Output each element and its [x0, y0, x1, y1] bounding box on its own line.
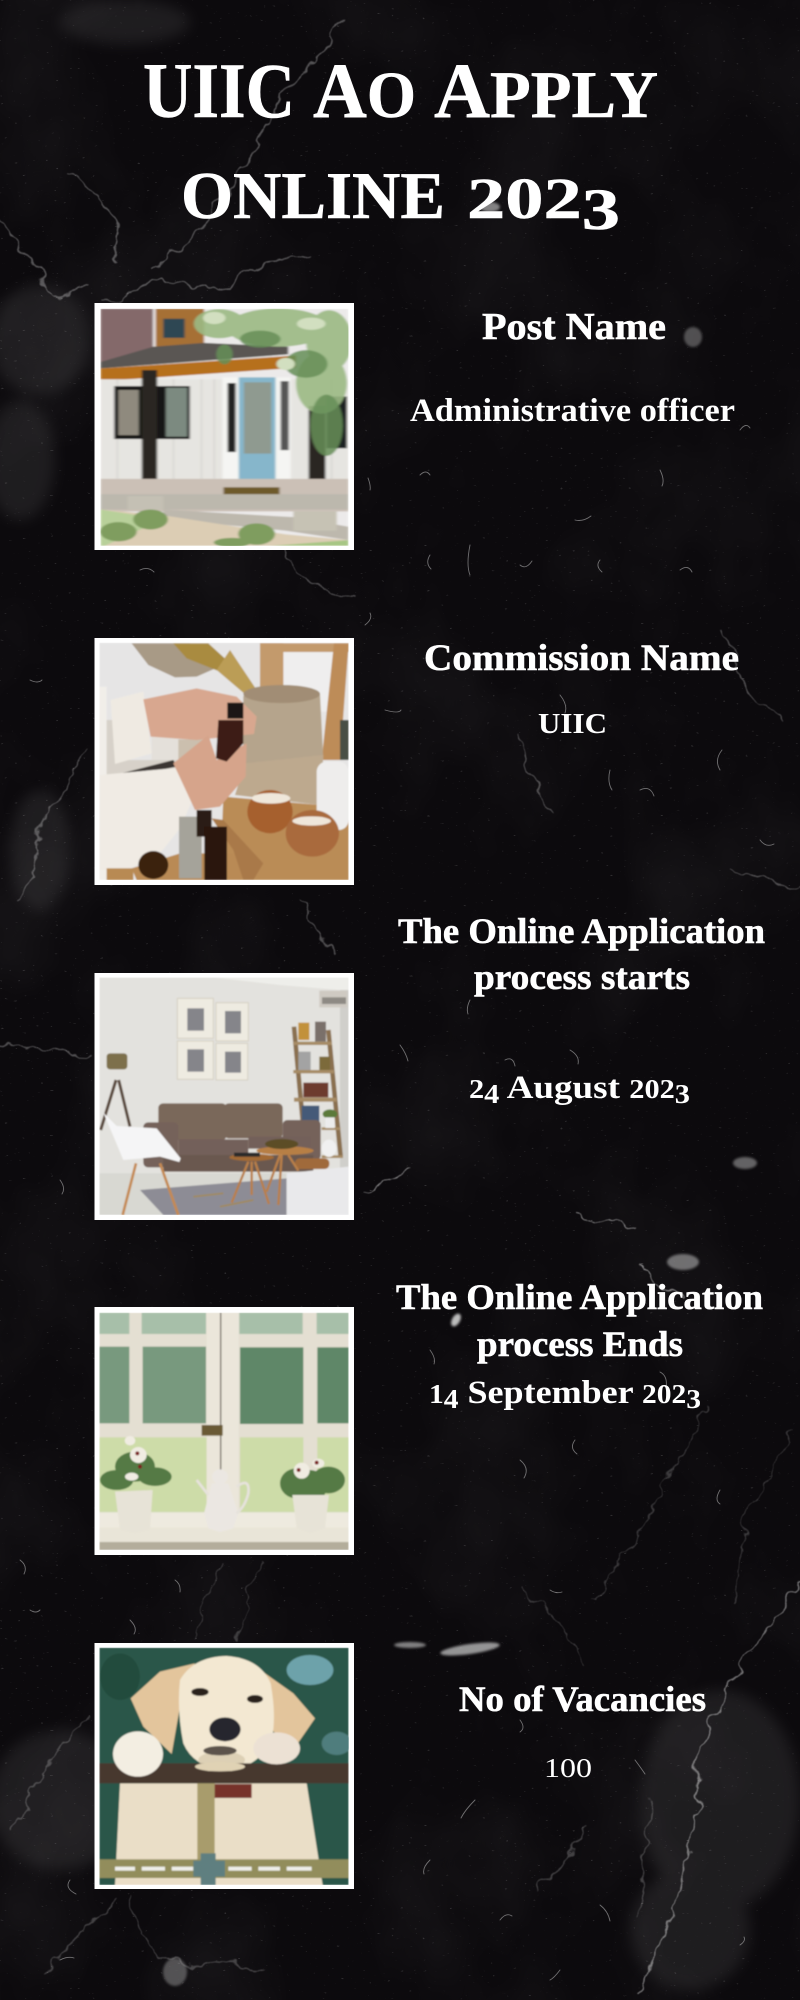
photo card: hands with essential oil bottle [94, 638, 354, 885]
text: number of vacancies [459, 1679, 706, 1783]
text: online application starts: 2 [469, 1074, 484, 1104]
title: ONLINE [181, 159, 445, 233]
photo card: house porch [94, 303, 354, 550]
text: post name [410, 306, 735, 429]
photo card: living room [94, 973, 354, 1220]
title: UIIC [143, 47, 295, 134]
title: AO [313, 47, 416, 134]
photo card: labrador puppy on fence [94, 1643, 354, 1889]
title: 3 [582, 177, 620, 242]
text: online application starts: The Online Application [398, 911, 765, 951]
text: post name: Post Name [482, 306, 666, 348]
text: online application starts [398, 911, 765, 1109]
text: post name: Administrative officer [410, 393, 735, 429]
text: online application ends [396, 1277, 763, 1414]
text: online application starts: 202 [629, 1074, 675, 1104]
text: online application ends: The Online Application [396, 1277, 763, 1317]
text: online application starts: August [499, 1070, 629, 1106]
text: commission name: Commission Name [424, 638, 739, 679]
text: commission name: UIIC [538, 708, 607, 740]
text: online application ends: September [458, 1375, 642, 1411]
photo card: window with flowers [94, 1307, 354, 1555]
text: online application starts: 4 [484, 1079, 499, 1109]
text: online application starts: 3 [675, 1079, 690, 1109]
text: online application starts: process starts [474, 957, 690, 997]
text: online application ends: 3 [686, 1384, 701, 1414]
text: commission name [424, 638, 739, 740]
title [143, 47, 658, 242]
text: number of vacancies: 100 [544, 1753, 592, 1783]
title: APPLY [434, 47, 658, 134]
text: online application ends: 1 [429, 1379, 444, 1409]
title: 202 [467, 166, 554, 231]
text: number of vacancies: No of Vacancies [459, 1679, 706, 1719]
text: online application ends: process Ends [477, 1324, 683, 1364]
text: online application ends: 4 [444, 1384, 458, 1414]
text: online application ends: 202 [642, 1379, 686, 1409]
